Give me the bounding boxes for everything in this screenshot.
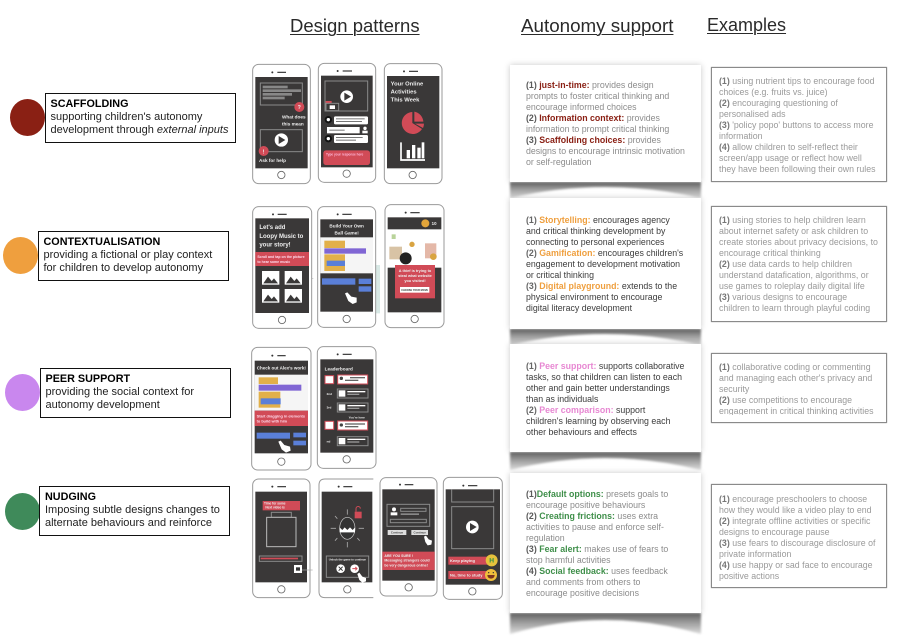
- phone: loopy music story: your story!: [259, 243, 291, 249]
- panel: nudging examples: designs to encourage pause: [719, 527, 830, 537]
- panel: scaffolding examples: screen/app usage or reflect how well: [719, 153, 862, 163]
- phone: thief alert game: steal what website: [398, 274, 432, 278]
- label: peer support: providing the social context for: [46, 386, 194, 398]
- panel: scaffolding examples: information: [719, 131, 763, 141]
- phone: what does this mean: What does: [282, 115, 306, 120]
- panel: nudging autonomy support: regulation: [526, 533, 565, 543]
- panel: contextualisation examples: children to learn through playful coding: [719, 303, 870, 313]
- label: peer support: [40, 368, 230, 418]
- phone: loopy music story: Loopy Music to: [259, 234, 304, 240]
- panel: scaffolding examples: (3) 'policy popo' buttons to access more: [719, 120, 873, 130]
- phone: keep playing or study: [443, 477, 502, 599]
- phone: loopy music story: Scroll and tap on the picture: [257, 255, 305, 259]
- phone: are you sure warning: Continue: [414, 531, 426, 535]
- heading: Examples: Examples: [707, 15, 786, 35]
- phone: what does this mean: this mean: [282, 121, 304, 126]
- panel: nudging examples: (2) integrate offline activities or specific: [719, 516, 870, 526]
- phone: your online activities: Activities: [391, 90, 417, 96]
- panel: contextualisation examples: (3) various designs to encourage: [719, 292, 847, 302]
- phone: leaderboard: 3rd: [327, 406, 332, 410]
- panel: contextualisation autonomy support: physical environment to encourage: [526, 292, 662, 302]
- panel: contextualisation examples: (1) using stories to help children learn: [719, 215, 866, 225]
- panel: nudging autonomy support: encourage positive decisions: [526, 588, 639, 598]
- panel: nudging examples: (4) use happy or sad face to encourage: [719, 560, 873, 570]
- panel: scaffolding examples: [711, 67, 887, 182]
- phone: unlock the game egg: [319, 479, 373, 598]
- phone row: contextualisation: [252, 204, 444, 329]
- phone: build your own ball game: Ball Game!: [335, 230, 359, 235]
- phone: loopy music story: Let's add: [259, 225, 286, 231]
- panel: scaffolding examples: (2) encouraging questioning of: [719, 98, 838, 108]
- panel: contextualisation examples: understand datafication, algorithms, or: [719, 270, 869, 280]
- phone: check out Alex's work: [252, 347, 311, 470]
- phone: your online activities: [384, 64, 442, 184]
- label: scaffolding: [44, 93, 236, 143]
- label: contextualisation: [38, 230, 228, 280]
- panel: contextualisation autonomy support: connecting to personal experiences: [526, 237, 664, 247]
- phone: your online activities: This Week: [391, 98, 420, 104]
- panel: peer support examples: and managing each other's privacy and: [719, 373, 872, 383]
- panel: nudging autonomy support: and comments from others to: [526, 577, 640, 587]
- phone: next video timer: Time for some: [264, 502, 286, 506]
- phone: check out Alex's work: Start dragging in elements: [257, 414, 305, 418]
- panel: peer support autonomy support: other behaviours and effects: [526, 427, 637, 437]
- panel: scaffolding autonomy support: (2) Information context: provides: [526, 113, 660, 123]
- panel: contextualisation autonomy support: digital literacy development: [526, 303, 632, 313]
- phone: keep playing or study: Keep playing: [450, 558, 475, 563]
- panel: peer support examples: engagement in critical thinking activities: [719, 406, 874, 416]
- panel: peer support autonomy support: children's learning by observing each: [526, 416, 670, 426]
- circle: peer support: [5, 374, 40, 411]
- panel: nudging examples: (3) use fears to discourage disclosure of: [719, 538, 875, 548]
- panel: scaffolding autonomy support: or self-regulation: [526, 157, 592, 167]
- label: contextualisation: for children to develop autonomy: [44, 262, 203, 274]
- phone row: scaffolding: [252, 62, 442, 184]
- phone row: nudging: [252, 476, 503, 600]
- phone: leaderboard: 2nd: [327, 392, 332, 396]
- panel: peer support examples: (1) collaborative coding or commenting: [719, 362, 871, 372]
- panel: contextualisation autonomy support: (1) Storytelling: encourages agency: [526, 215, 670, 225]
- panel: scaffolding examples: they have been following their own rules: [719, 164, 875, 174]
- circle: nudging: [5, 493, 40, 530]
- phone: what does this mean: ?: [298, 105, 301, 111]
- phone: build your own ball game: [318, 207, 376, 327]
- panel: nudging autonomy support: (3) Fear alert: makes use of fears to: [526, 544, 668, 554]
- panel: nudging examples: positive actions: [719, 571, 779, 581]
- panel: peer support examples: [711, 353, 887, 423]
- phone: are you sure warning: Messaging strangers could: [384, 559, 430, 563]
- phone: thief alert game: [385, 205, 444, 328]
- panel: peer support autonomy support: [510, 344, 701, 452]
- panel: scaffolding autonomy support: (1) just-in-time: provides design: [526, 80, 654, 90]
- panel: scaffolding examples: (1) using nutrient tips to encourage food: [719, 76, 875, 86]
- panel: contextualisation examples: [711, 206, 887, 322]
- panel: contextualisation autonomy support: and critical thinking development by: [526, 226, 665, 236]
- panel: nudging autonomy support: encourage positive behaviours: [526, 500, 645, 510]
- label: scaffolding: SCAFFOLDING: [50, 98, 128, 110]
- label: peer support: PEER SUPPORT: [46, 373, 130, 385]
- panel: peer support examples: (2) use competitions to encourage: [719, 395, 852, 405]
- panel: nudging autonomy support: stop harmful activities: [526, 555, 611, 565]
- phone: thief alert game: 10: [432, 221, 437, 226]
- label: contextualisation: providing a fictional or play context: [44, 249, 212, 261]
- panel: contextualisation examples: (2) use data cards to help children: [719, 259, 852, 269]
- phone: are you sure warning: be very dangerous online!: [384, 563, 428, 567]
- panel: nudging autonomy support: (1)Default options: presets goals to: [526, 489, 668, 499]
- panel: nudging autonomy support: [510, 473, 701, 613]
- panel: scaffolding autonomy support: prompts to foster critical thinking and: [526, 91, 669, 101]
- phone: build your own ball game: Build Your Own: [329, 224, 364, 229]
- label: peer support: autonomy development: [46, 399, 160, 411]
- phone: keep playing or study: No, time to study: [450, 572, 483, 577]
- phone: keep playing or study: H: [489, 558, 494, 565]
- panel: peer support autonomy support: (1) Peer support: supports collaborative: [526, 361, 684, 371]
- panel: nudging examples: (1) encourage preschoolers to choose: [719, 494, 867, 504]
- panel: contextualisation autonomy support: (3) Digital playground: extends to the: [526, 281, 677, 291]
- phone: leaderboard: [317, 347, 376, 468]
- phone: are you sure warning: [380, 478, 437, 596]
- phone: next video timer: Next video is: [265, 506, 285, 510]
- phone: your online activities: Your Online: [391, 81, 424, 87]
- phone: leaderboard: You're here: [349, 416, 365, 420]
- panel: contextualisation autonomy support: [510, 198, 701, 329]
- label: nudging: [39, 486, 230, 536]
- phone: loopy music story: [253, 207, 312, 328]
- panel: contextualisation autonomy support: or critical thinking: [526, 270, 594, 280]
- circle: scaffolding: [10, 99, 45, 136]
- panel: contextualisation examples: use games to roleplay daily digital life: [719, 281, 865, 291]
- label: nudging: Imposing subtle designs changes to: [45, 504, 220, 516]
- panel: scaffolding autonomy support: information to prompt critical thinking: [526, 124, 669, 134]
- phone: unlock the game egg: Unlock the game to continue: [329, 558, 366, 562]
- phone: what does this mean: !: [263, 149, 265, 155]
- phone: thief alert game: you visited!: [404, 279, 426, 283]
- panel: peer support autonomy support: tasks, so that children can listen to each: [526, 372, 682, 382]
- circle: contextualisation: [3, 237, 38, 274]
- phone: leaderboard: Leaderboard: [325, 367, 353, 372]
- label: contextualisation: CONTEXTUALISATION: [44, 236, 160, 248]
- panel: peer support autonomy support: than as individuals: [526, 394, 598, 404]
- panel: nudging autonomy support: (4) Social feedback: uses feedback: [526, 566, 668, 576]
- phone: what does this mean: Ask for help: [259, 158, 286, 163]
- panel: scaffolding examples: personalised ads: [719, 109, 786, 119]
- panel: scaffolding autonomy support: (3) Scaffolding choices: provides: [526, 135, 661, 145]
- phone: check out Alex's work: Check out Alex's work!: [257, 365, 306, 370]
- phone: leaderboard: nd: [327, 439, 330, 443]
- panel: nudging autonomy support: (2) Creating frictions: uses extra: [526, 511, 658, 521]
- phone: check out Alex's work: to build with him: [257, 420, 288, 424]
- phone: loopy music story: to hear some music: [257, 260, 290, 264]
- panel: contextualisation autonomy support: (2) Gamification: encourages children's: [526, 248, 683, 258]
- panel: contextualisation examples: create stories about privacy decisions, to: [719, 237, 878, 247]
- panel: nudging autonomy support: activities to pause and enforce self-: [526, 522, 664, 532]
- phone: video with chat: [318, 63, 376, 182]
- phone: next video timer: [253, 479, 313, 598]
- panel: peer support examples: security: [719, 384, 749, 394]
- panel: nudging examples: private information: [719, 549, 791, 559]
- panel: nudging examples: [711, 484, 887, 588]
- phone: what does this mean: [253, 64, 310, 184]
- label: nudging: alternate behaviours and reinforce: [45, 517, 212, 529]
- label: scaffolding: development through external inputs: [50, 124, 228, 136]
- phone: thief alert game: CHOOSE YOUR MOVE: [401, 289, 428, 292]
- panel: scaffolding examples: (4) allow children to self-reflect their: [719, 142, 858, 152]
- panel: contextualisation autonomy support: engagement to development motivation: [526, 259, 680, 269]
- panel: scaffolding examples: choices (e.g. fruits vs. juice): [719, 87, 828, 97]
- panel: scaffolding autonomy support: encourage informed choices: [526, 102, 637, 112]
- panel: nudging examples: how they would like a video play to end: [719, 505, 872, 515]
- phone row: peer support: [251, 346, 376, 470]
- phone: video with chat: Type your response here: [326, 152, 364, 156]
- phone: are you sure warning: Continue: [391, 531, 404, 535]
- phone: thief alert game: A thief is trying to: [399, 269, 432, 273]
- label: scaffolding: supporting children's autonomy: [50, 111, 202, 123]
- panel: contextualisation examples: encourage critical thinking: [719, 248, 821, 258]
- heading: Autonomy support: Autonomy support: [521, 15, 673, 36]
- panel: contextualisation examples: about internet safety or ask children to: [719, 226, 868, 236]
- label: nudging: NUDGING: [45, 491, 96, 503]
- panel: scaffolding autonomy support: [510, 65, 701, 182]
- panel: peer support autonomy support: other and gain better understandings: [526, 383, 670, 393]
- panel: peer support autonomy support: (2) Peer comparison: support: [526, 405, 645, 415]
- phone: are you sure warning: ARE YOU SURE !: [384, 554, 413, 558]
- heading: Design patterns: Design patterns: [290, 15, 420, 36]
- panel: scaffolding autonomy support: designs to encourage intrinsic motivation: [526, 146, 685, 156]
